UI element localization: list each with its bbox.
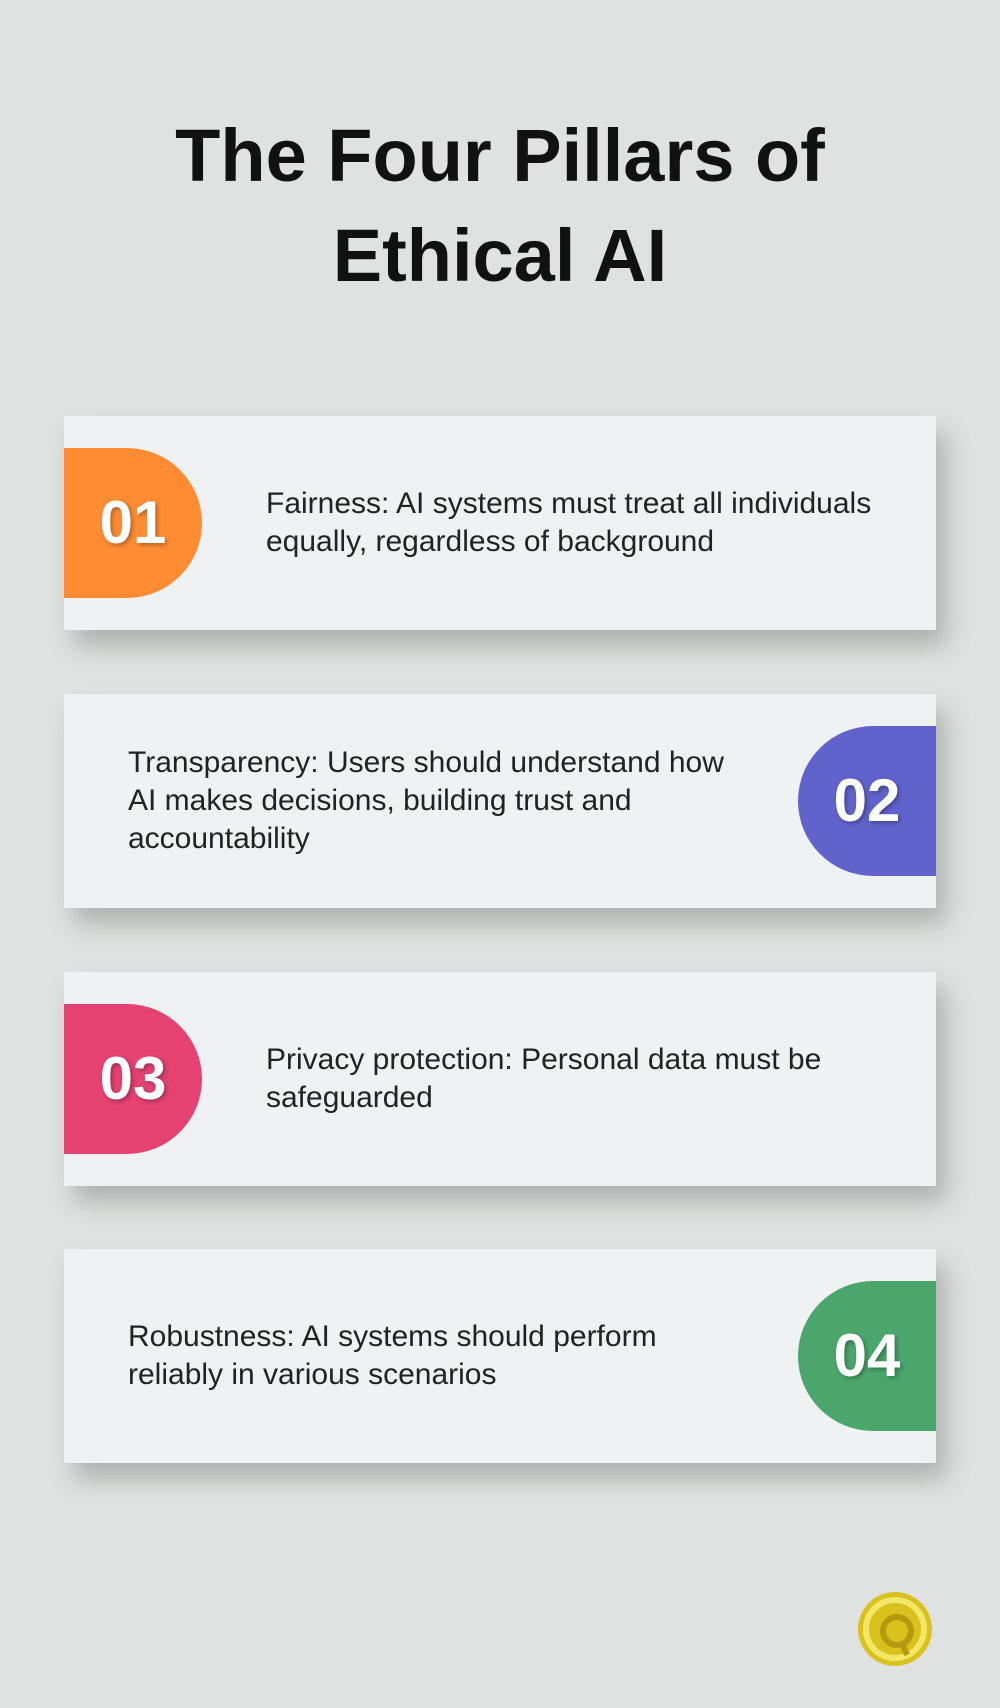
badge 04: 04 (834, 1322, 900, 1389)
card 1 (64, 416, 936, 630)
badge 03 (64, 1004, 202, 1154)
text 2: Transparency: Users should understand how AI makes decisions, building trust and accountability (128, 746, 724, 855)
text 4: Robustness: AI systems should perform reliably in various scenarios (128, 1320, 657, 1391)
card 2 (64, 694, 936, 908)
title: Ethical AI (333, 214, 667, 297)
icon: logo (858, 1592, 932, 1666)
text 3: Privacy protection: Personal data must be safeguarded (266, 1043, 821, 1114)
title: The Four Pillars of (175, 114, 825, 197)
text 1: Fairness: AI systems must treat all individuals equally, regardless of background (266, 487, 871, 558)
title (175, 114, 825, 297)
badge 01: 01 (100, 489, 166, 556)
badge 01 (64, 448, 202, 598)
card 4 (64, 1249, 936, 1463)
badge 02 (798, 726, 936, 876)
card 3 (64, 972, 936, 1186)
badge 02: 02 (834, 767, 900, 834)
badge 03: 03 (100, 1045, 166, 1112)
badge 04 (798, 1281, 936, 1431)
